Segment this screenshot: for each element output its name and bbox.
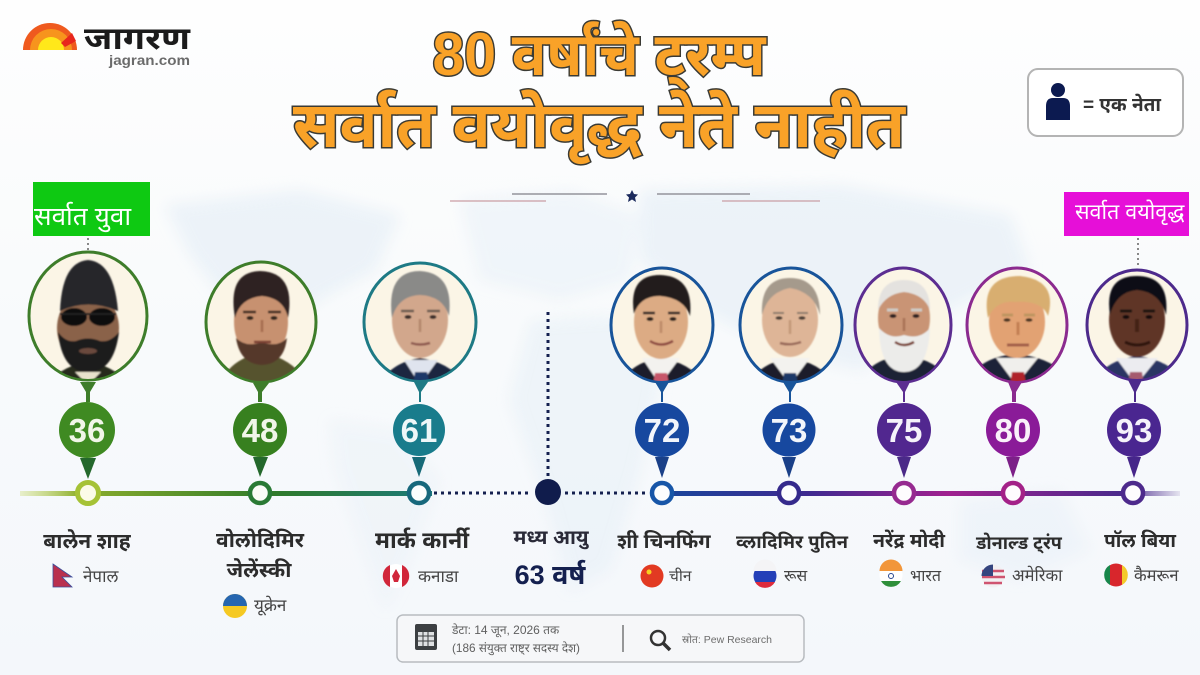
age badge: 75 (886, 412, 922, 449)
world map background (165, 185, 1090, 610)
legend: one leader (1028, 69, 1183, 136)
callout: youngest: सर्वात युवा (34, 201, 132, 232)
leader: Xi Jinping (611, 268, 713, 588)
leader: Donald Trump (967, 268, 1070, 588)
callout: youngest (33, 182, 150, 236)
connector (1008, 382, 1022, 402)
connector (896, 382, 910, 402)
name: मार्क कार्नी (375, 527, 470, 553)
name: डोनाल्ड ट्रंप (975, 533, 1063, 554)
title: सर्वात वयोवृद्ध नेते नाहीत (293, 89, 906, 164)
connector (1128, 380, 1142, 402)
timeline node (1123, 483, 1143, 503)
timeline node (250, 483, 270, 503)
country: कैमरून (1134, 566, 1179, 585)
name: नरेंद्र मोदी (873, 529, 946, 552)
age badge (635, 403, 689, 478)
leader: Paul Biya (1087, 270, 1187, 586)
age badge (393, 404, 445, 477)
icon: magnifier (651, 631, 670, 650)
leader: Volodymyr Zelensky: जेलेंस्की (227, 558, 292, 582)
icon: rising sun (23, 23, 77, 50)
footer source box: (186 संयुक्त राष्ट्र सदस्य देश) (452, 641, 580, 655)
title (293, 21, 906, 164)
median value: 63 वर्ष (515, 559, 586, 590)
portrait (967, 268, 1070, 385)
country: रूस (784, 568, 808, 585)
connector (414, 382, 428, 402)
portrait (740, 268, 842, 385)
connector (655, 382, 669, 402)
source note: स्रोत: Pew Research (682, 633, 772, 646)
age badge: 48 (242, 412, 278, 449)
title: 80 वर्षांचे ट्रम्प (432, 21, 767, 91)
leader: Balen Shah (29, 252, 147, 587)
median label: मध्य आयु (513, 527, 590, 550)
portrait (1087, 270, 1187, 385)
age badge: 80 (995, 412, 1031, 449)
age badge (986, 403, 1040, 478)
name: पॉल बिया (1104, 530, 1176, 552)
portrait (364, 263, 476, 385)
legend text: = एक नेता (1083, 93, 1161, 116)
logo url: jagran.com (108, 53, 190, 68)
name: वोलोदिमिर (216, 528, 305, 552)
country: भारत (910, 568, 942, 585)
flag: Ukraine (223, 594, 247, 618)
name: शी चिनफिंग (617, 529, 711, 553)
country: चीन (669, 567, 692, 585)
name: बालेन शाह (43, 529, 132, 553)
age badge: 93 (1116, 412, 1152, 449)
leader: Volodymyr Zelensky (206, 262, 316, 618)
decorative star divider (450, 190, 820, 202)
median marker (535, 479, 561, 505)
flag: China (640, 564, 664, 588)
connector (783, 382, 797, 402)
portrait (611, 268, 713, 385)
leader: Mark Carney (364, 263, 476, 588)
age badge: 72 (644, 412, 680, 449)
logo: jagran (23, 21, 191, 68)
timeline node (1003, 483, 1023, 503)
age badge: 73 (771, 412, 807, 449)
country: नेपाल (83, 565, 119, 586)
age badge (1107, 403, 1161, 478)
flag: Canada (383, 564, 409, 588)
timeline (20, 491, 1180, 496)
callout: oldest (1064, 192, 1189, 236)
footer source box (397, 615, 804, 662)
callout: oldest: सर्वात वयोवृद्ध (1075, 199, 1185, 226)
icon: calendar (415, 624, 437, 650)
flag: Nepal (53, 564, 72, 587)
timeline node (409, 483, 429, 503)
country: कनाडा (418, 567, 459, 586)
flag: Cameroon (1104, 564, 1128, 586)
flag: India (880, 560, 902, 587)
timeline node (78, 482, 98, 504)
country: अमेरिका (1012, 566, 1063, 585)
timeline node (779, 483, 799, 503)
portrait (206, 262, 316, 385)
connector (253, 383, 269, 402)
age badge: 61 (401, 412, 437, 449)
logo wordmark: जागरण (84, 21, 191, 56)
timeline node (652, 483, 672, 503)
median dotted line (546, 312, 550, 476)
country: यूक्रेन (254, 594, 287, 617)
median age (513, 479, 590, 590)
name: व्लादिमिर पुतिन (736, 531, 849, 554)
leader: Narendra Modi (855, 268, 952, 587)
leader: Vladimir Putin (736, 268, 849, 588)
icon: person (1046, 83, 1070, 120)
flag: USA (982, 564, 1005, 588)
age badge (762, 404, 816, 478)
age badge (59, 402, 115, 479)
flag: Russia (754, 560, 776, 588)
data note: डेटा: 14 जून, 2026 तक (451, 622, 560, 638)
age badge (877, 403, 931, 478)
portrait (855, 268, 952, 385)
age badge (233, 403, 287, 477)
connector (80, 382, 96, 402)
portrait (29, 252, 147, 385)
timeline node (894, 483, 914, 503)
age badge: 36 (69, 412, 105, 449)
